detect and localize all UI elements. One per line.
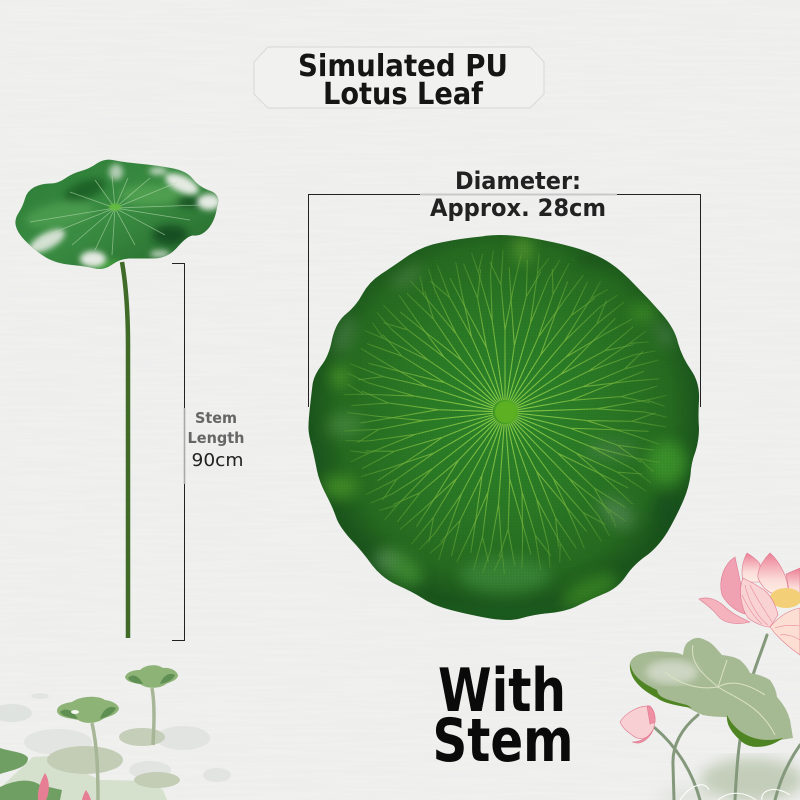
title text: Lotus Leaf [323, 77, 484, 112]
stem length bracket [172, 264, 244, 640]
small leaf [15, 160, 221, 269]
diameter label: Approx. 28cm [430, 194, 606, 222]
leaf texture [310, 235, 698, 620]
with stem caption: Stem [432, 706, 574, 776]
large lotus leaf [300, 225, 710, 630]
pad reflections [0, 693, 231, 800]
pad leaf right [125, 665, 178, 688]
lower left leaves [0, 748, 62, 800]
stem length label: 90cm [192, 450, 244, 471]
watercolor lily pads left [0, 665, 231, 800]
leaf edge shading [312, 236, 687, 620]
diameter bracket [308, 167, 700, 407]
pad leaf left [57, 697, 119, 723]
diameter label: Diameter: [455, 167, 581, 195]
pink buds [38, 773, 91, 800]
stem length label: Length [188, 429, 244, 447]
lotus flower [699, 553, 800, 655]
diameter label [430, 167, 606, 222]
watercolor lotus right [620, 553, 800, 800]
leaf centre [494, 400, 518, 424]
stem length label: Stem [195, 409, 237, 427]
with stem caption: With [438, 656, 566, 726]
water swirls [680, 785, 790, 800]
title plaque [254, 47, 544, 112]
radial veins [342, 250, 668, 574]
stem leaf photo [15, 160, 221, 638]
pad stems [92, 688, 154, 800]
lotus bud [620, 706, 655, 743]
with stem caption [432, 656, 574, 776]
title text: Simulated PU [298, 49, 508, 84]
stem length label [188, 409, 244, 471]
green leaf [630, 638, 793, 747]
ink wash [658, 758, 800, 800]
title text [298, 49, 508, 112]
stems [655, 635, 800, 800]
stem [122, 262, 128, 638]
